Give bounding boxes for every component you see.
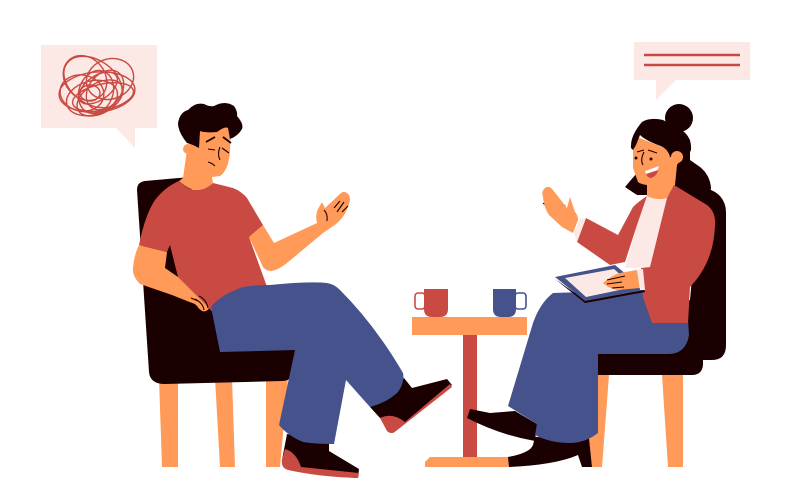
jacket xyxy=(641,185,715,323)
shoe: back foot xyxy=(467,409,537,441)
red mug xyxy=(415,289,448,317)
blue mug xyxy=(493,289,526,317)
hair xyxy=(178,103,242,148)
hair xyxy=(631,104,693,165)
face lines xyxy=(190,137,348,311)
speech bubble: calm lines xyxy=(634,42,750,100)
chair: woman xyxy=(589,188,726,467)
icon: scribble xyxy=(54,46,139,123)
mouth xyxy=(645,166,659,178)
head and neck xyxy=(179,125,231,190)
man xyxy=(133,103,452,478)
shoe: front foot xyxy=(508,437,592,467)
near arm xyxy=(133,245,211,311)
table xyxy=(412,289,527,467)
cuff xyxy=(574,218,586,242)
shoe: raised foot xyxy=(370,378,452,433)
trousers xyxy=(508,290,689,443)
shoe: lower foot xyxy=(282,434,359,478)
blouse xyxy=(625,196,667,268)
trousers xyxy=(211,282,403,444)
far arm and hand xyxy=(249,192,350,271)
raised hand xyxy=(542,187,578,233)
hand on tablet xyxy=(603,270,640,290)
hair back xyxy=(664,129,711,205)
tablet xyxy=(555,265,645,303)
face lines xyxy=(543,150,657,216)
t-shirt xyxy=(139,181,270,315)
speech bubble: tangled thoughts xyxy=(41,45,157,148)
head and neck xyxy=(633,137,683,205)
chair: man xyxy=(137,177,296,467)
woman xyxy=(467,104,715,467)
